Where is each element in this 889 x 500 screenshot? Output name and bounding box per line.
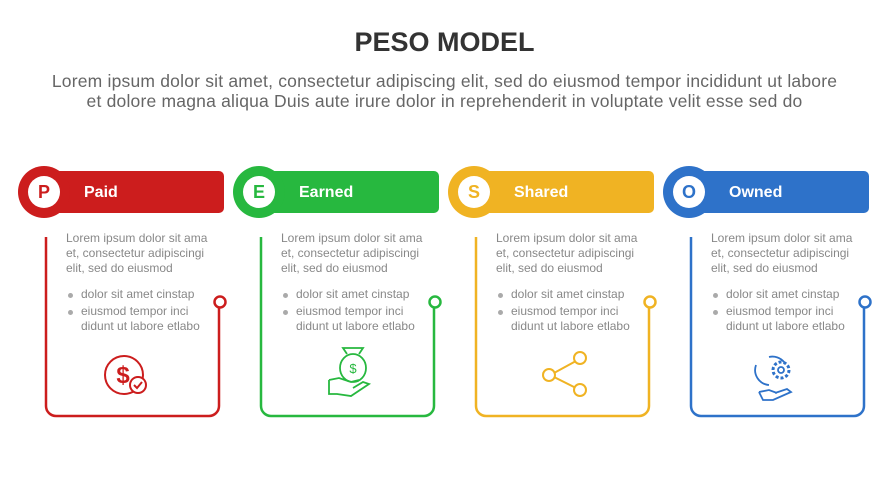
- panel: paid: Paid: [84, 184, 118, 201]
- panel: owned: Owned: [729, 184, 782, 201]
- subtitle: Lorem ipsum dolor sit amet, consectetur adipiscing elit, sed do eiusmod tempor incididunt ut labore: [52, 71, 837, 91]
- panel: earned: E: [253, 182, 265, 202]
- header: owned: [688, 171, 869, 213]
- subtitle: [52, 71, 837, 111]
- panel: earned: [233, 166, 442, 418]
- text: paid: dolor sit amet cinstap: [81, 287, 194, 301]
- text: shared: et, consectetur adipiscingi: [496, 246, 634, 260]
- text: owned: eiusmod tempor inci: [726, 304, 833, 318]
- subtitle: et dolore magna aliqua Duis aute irure dolor in reprehenderit in voluptate velit esse sed do: [87, 91, 802, 111]
- text: earned: elit, sed do eiusmod: [281, 261, 388, 275]
- text: owned: [711, 231, 852, 333]
- text: paid: [66, 231, 208, 333]
- text: paid: Lorem ipsum dolor sit ama: [66, 231, 207, 245]
- text: earned: dolor sit amet cinstap: [296, 287, 409, 301]
- panel: shared: [448, 166, 657, 418]
- text: paid: et, consectetur adipiscingi: [66, 246, 204, 260]
- panel: earned: $: [349, 361, 357, 376]
- panel: earned: Earned: [299, 184, 353, 201]
- header: paid: [43, 171, 224, 213]
- header: shared: [473, 171, 654, 213]
- text: earned: didunt ut labore etlabo: [296, 319, 415, 333]
- text: shared: eiusmod tempor inci: [511, 304, 618, 318]
- text: earned: eiusmod tempor inci: [296, 304, 403, 318]
- header: earned: [258, 171, 439, 213]
- text: owned: et, consectetur adipiscingi: [711, 246, 849, 260]
- text: owned: dolor sit amet cinstap: [726, 287, 839, 301]
- text: shared: [496, 231, 638, 333]
- panel: paid: P: [38, 182, 50, 202]
- text: owned: didunt ut labore etlabo: [726, 319, 845, 333]
- text: owned: elit, sed do eiusmod: [711, 261, 818, 275]
- text: earned: et, consectetur adipiscingi: [281, 246, 419, 260]
- panel: shared: S: [468, 182, 480, 202]
- panel: shared: Shared: [514, 184, 568, 201]
- panel: paid: [18, 166, 227, 418]
- text: shared: Lorem ipsum dolor sit ama: [496, 231, 637, 245]
- text: shared: elit, sed do eiusmod: [496, 261, 603, 275]
- text: paid: didunt ut labore etlabo: [81, 319, 200, 333]
- title: PESO MODEL: [354, 27, 535, 57]
- panel: owned: [663, 166, 872, 418]
- text: paid: elit, sed do eiusmod: [66, 261, 173, 275]
- panel: paid: $: [116, 362, 130, 389]
- text: earned: Lorem ipsum dolor sit ama: [281, 231, 422, 245]
- text: shared: didunt ut labore etlabo: [511, 319, 630, 333]
- text: shared: dolor sit amet cinstap: [511, 287, 624, 301]
- text: owned: Lorem ipsum dolor sit ama: [711, 231, 852, 245]
- text: earned: [281, 231, 422, 333]
- panel: owned: O: [682, 182, 696, 202]
- text: paid: eiusmod tempor inci: [81, 304, 188, 318]
